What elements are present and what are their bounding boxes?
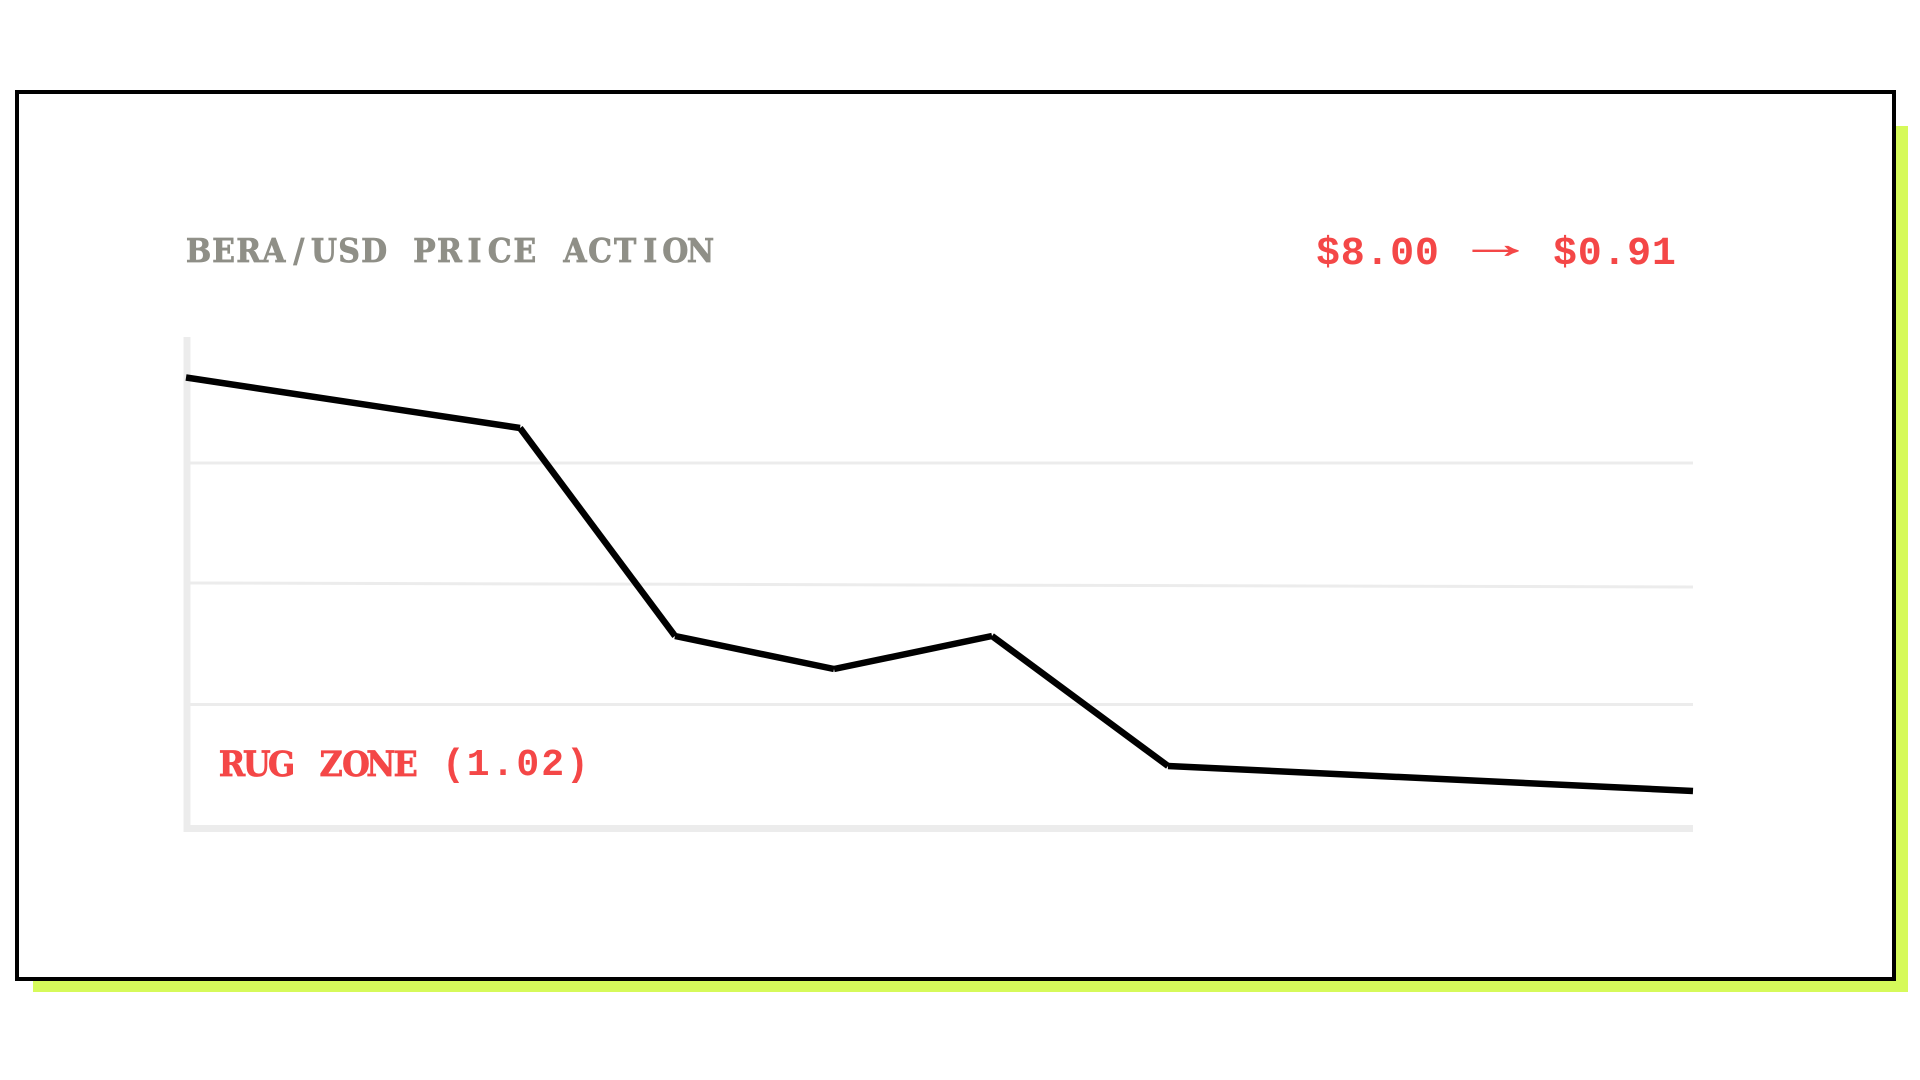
end price: $0.91 — [1553, 232, 1677, 277]
callout: price change — [1316, 225, 1677, 277]
lime offset shadow — [33, 126, 1908, 992]
start price: $8.00 — [1316, 232, 1440, 277]
label: rug zone — [219, 744, 591, 787]
heading: pair title: BERA/USD PRICE ACTION — [186, 232, 714, 270]
rug zone value: (1.02) — [442, 744, 591, 787]
chart: price line chart — [186, 337, 1693, 828]
chart axes — [187, 337, 1693, 828]
arrow: → — [1473, 225, 1519, 270]
rug zone words: RUG ZONE — [219, 744, 418, 784]
price line — [186, 378, 1693, 791]
grid lines — [190, 463, 1693, 704]
